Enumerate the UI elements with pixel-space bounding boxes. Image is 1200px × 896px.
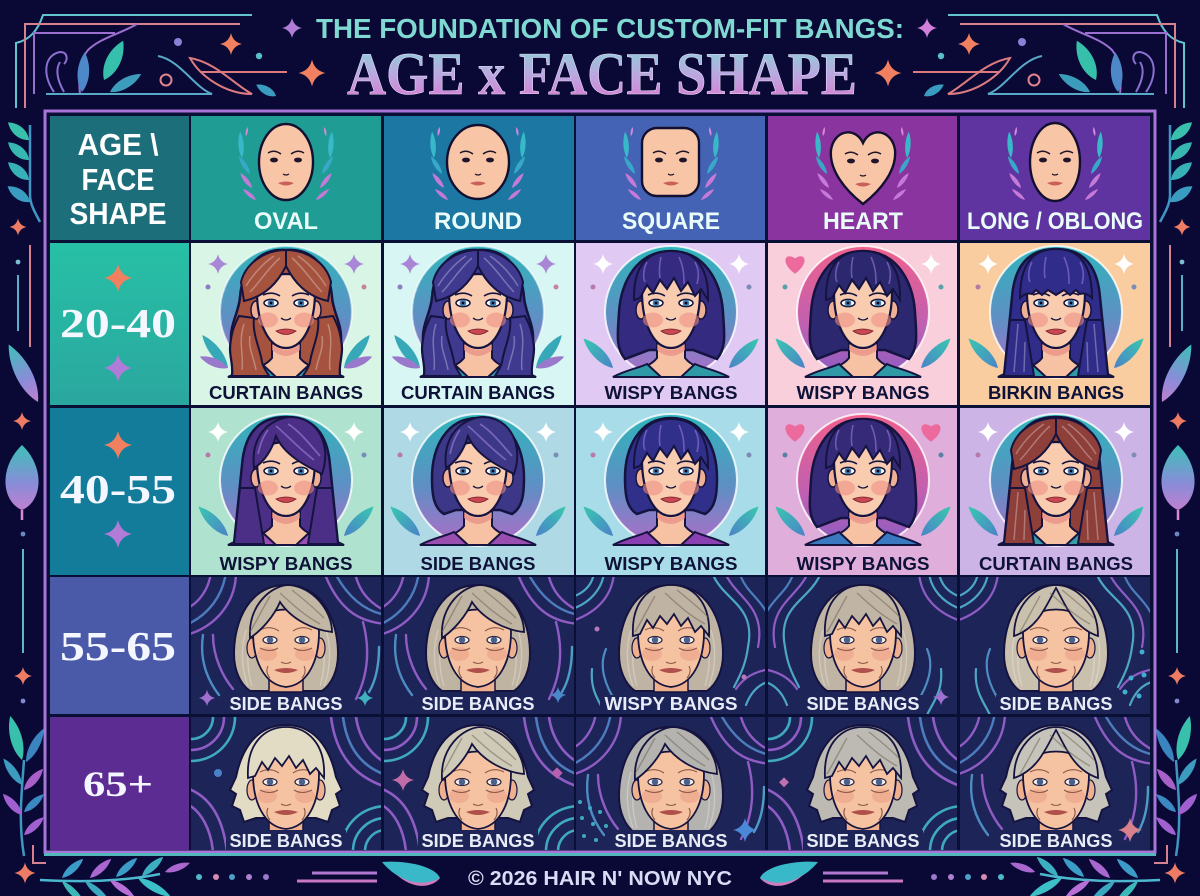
cell: 65+ oval, side bangs bbox=[147, 673, 431, 896]
cell: 65+ long, side bangs bbox=[955, 712, 1155, 851]
row label: 55-65 bbox=[50, 577, 189, 714]
header corner cell: FACE bbox=[82, 162, 154, 197]
cell: 55-65 square, wispy bangs: WISPY BANGS bbox=[604, 694, 738, 714]
column: heart bbox=[768, 116, 957, 240]
column: square: SQUARE bbox=[622, 208, 720, 235]
row label: 65+ bbox=[50, 717, 189, 850]
cell: 65+ heart, side bangs bbox=[724, 673, 1008, 896]
cell: 20-40 long, birkin bangs: BIRKIN BANGS bbox=[988, 383, 1124, 403]
cell: 20-40 oval, curtain bangs: CURTAIN BANGS bbox=[209, 383, 363, 403]
cell: 40-55 round, side bangs bbox=[384, 408, 574, 575]
title bbox=[316, 13, 904, 107]
cell: 65+ round, side bangs: SIDE BANGS bbox=[422, 831, 534, 851]
row label: 65+: 65+ bbox=[83, 764, 153, 804]
title line 2: AGE x FACE SHAPE bbox=[347, 41, 857, 107]
row label: 20-40 bbox=[50, 243, 189, 405]
cell: 40-55 heart, wispy bangs bbox=[768, 408, 957, 575]
cell: 20-40 round, curtain bangs bbox=[384, 243, 574, 405]
cell: 20-40 heart, wispy bangs: WISPY BANGS bbox=[796, 383, 930, 403]
cell: 55-65 square, wispy bangs bbox=[572, 573, 772, 715]
column: long / oblong: LONG / OBLONG bbox=[967, 208, 1143, 235]
cell: 65+ square, side bangs: SIDE BANGS bbox=[614, 831, 728, 851]
header corner cell: SHAPE bbox=[70, 196, 166, 231]
cell: 20-40 square, wispy bangs bbox=[576, 243, 765, 405]
cell: 55-65 oval, side bangs: SIDE BANGS bbox=[230, 694, 342, 714]
row label: 40-55: 40-55 bbox=[60, 466, 176, 512]
footer credit: © 2026 HAIR N' NOW NYC bbox=[468, 868, 732, 890]
cell: 20-40 square, wispy bangs: WISPY BANGS bbox=[604, 383, 738, 403]
decoration: bottom-right ornament bbox=[760, 845, 1186, 896]
decoration: left side leaves bbox=[0, 119, 48, 856]
bottom teal rule bbox=[44, 853, 1156, 856]
decoration: left star bbox=[282, 18, 302, 38]
cell: 55-65 heart, side bangs bbox=[761, 573, 961, 715]
header corner cell: AGE \ bbox=[78, 127, 159, 162]
column: round: ROUND bbox=[434, 208, 522, 235]
cell: 20-40 long, birkin bangs bbox=[960, 243, 1150, 405]
cell: 65+ round, side bangs bbox=[340, 673, 624, 896]
column: heart: HEART bbox=[823, 208, 903, 235]
decoration: top-right corner ornament bbox=[874, 15, 1184, 108]
cell: 65+ long, side bangs: SIDE BANGS bbox=[1000, 831, 1112, 851]
column: round bbox=[384, 116, 574, 240]
cell: 40-55 oval, wispy bangs bbox=[191, 408, 381, 575]
cell: 55-65 long, side bangs: SIDE BANGS bbox=[1000, 694, 1112, 714]
column: square bbox=[576, 116, 765, 240]
row label: 40-55 bbox=[50, 408, 189, 575]
column: oval bbox=[191, 116, 381, 240]
cell: 40-55 square, wispy bangs: WISPY BANGS bbox=[604, 554, 738, 574]
cell: 65+ square, side bangs bbox=[571, 712, 771, 851]
decoration: right side leaves bbox=[1152, 119, 1200, 856]
cell: 40-55 square, wispy bangs bbox=[576, 408, 765, 575]
decoration: right star bbox=[917, 18, 937, 38]
row label: 55-65: 55-65 bbox=[60, 623, 176, 669]
cell: 65+ oval, side bangs: SIDE BANGS bbox=[230, 831, 342, 851]
table header row bbox=[50, 116, 1150, 240]
cell: 65+ heart, side bangs: SIDE BANGS bbox=[806, 831, 920, 851]
cell: 40-55 heart, wispy bangs: WISPY BANGS bbox=[796, 554, 930, 574]
title line 1: THE FOUNDATION OF CUSTOM-FIT BANGS: bbox=[316, 13, 904, 44]
cell: 20-40 heart, wispy bangs bbox=[768, 243, 957, 405]
cell: 40-55 oval, wispy bangs: WISPY BANGS bbox=[220, 554, 352, 574]
cell: 20-40 oval, curtain bangs bbox=[191, 243, 381, 405]
column: oval: OVAL bbox=[254, 208, 318, 235]
row label: 20-40: 20-40 bbox=[60, 300, 176, 346]
header corner cell bbox=[50, 116, 189, 240]
cell: 40-55 long, curtain bangs: CURTAIN BANGS bbox=[979, 554, 1133, 574]
cell: 20-40 round, curtain bangs: CURTAIN BANGS bbox=[401, 383, 555, 403]
cell: 40-55 round, side bangs: SIDE BANGS bbox=[420, 554, 536, 574]
cell: 40-55 long, curtain bangs bbox=[960, 408, 1150, 575]
decoration: bottom-left ornament bbox=[14, 845, 440, 896]
table frame bbox=[45, 111, 1155, 852]
cell: 55-65 round, side bangs bbox=[379, 572, 579, 714]
decoration: top-left corner ornament bbox=[16, 15, 326, 108]
cell: 55-65 heart, side bangs: SIDE BANGS bbox=[806, 694, 920, 714]
column: long / oblong bbox=[960, 116, 1150, 240]
cell: 55-65 round, side bangs: SIDE BANGS bbox=[422, 694, 534, 714]
cell: 55-65 long, side bangs bbox=[956, 573, 1156, 715]
cell: 55-65 oval, side bangs bbox=[186, 572, 386, 714]
